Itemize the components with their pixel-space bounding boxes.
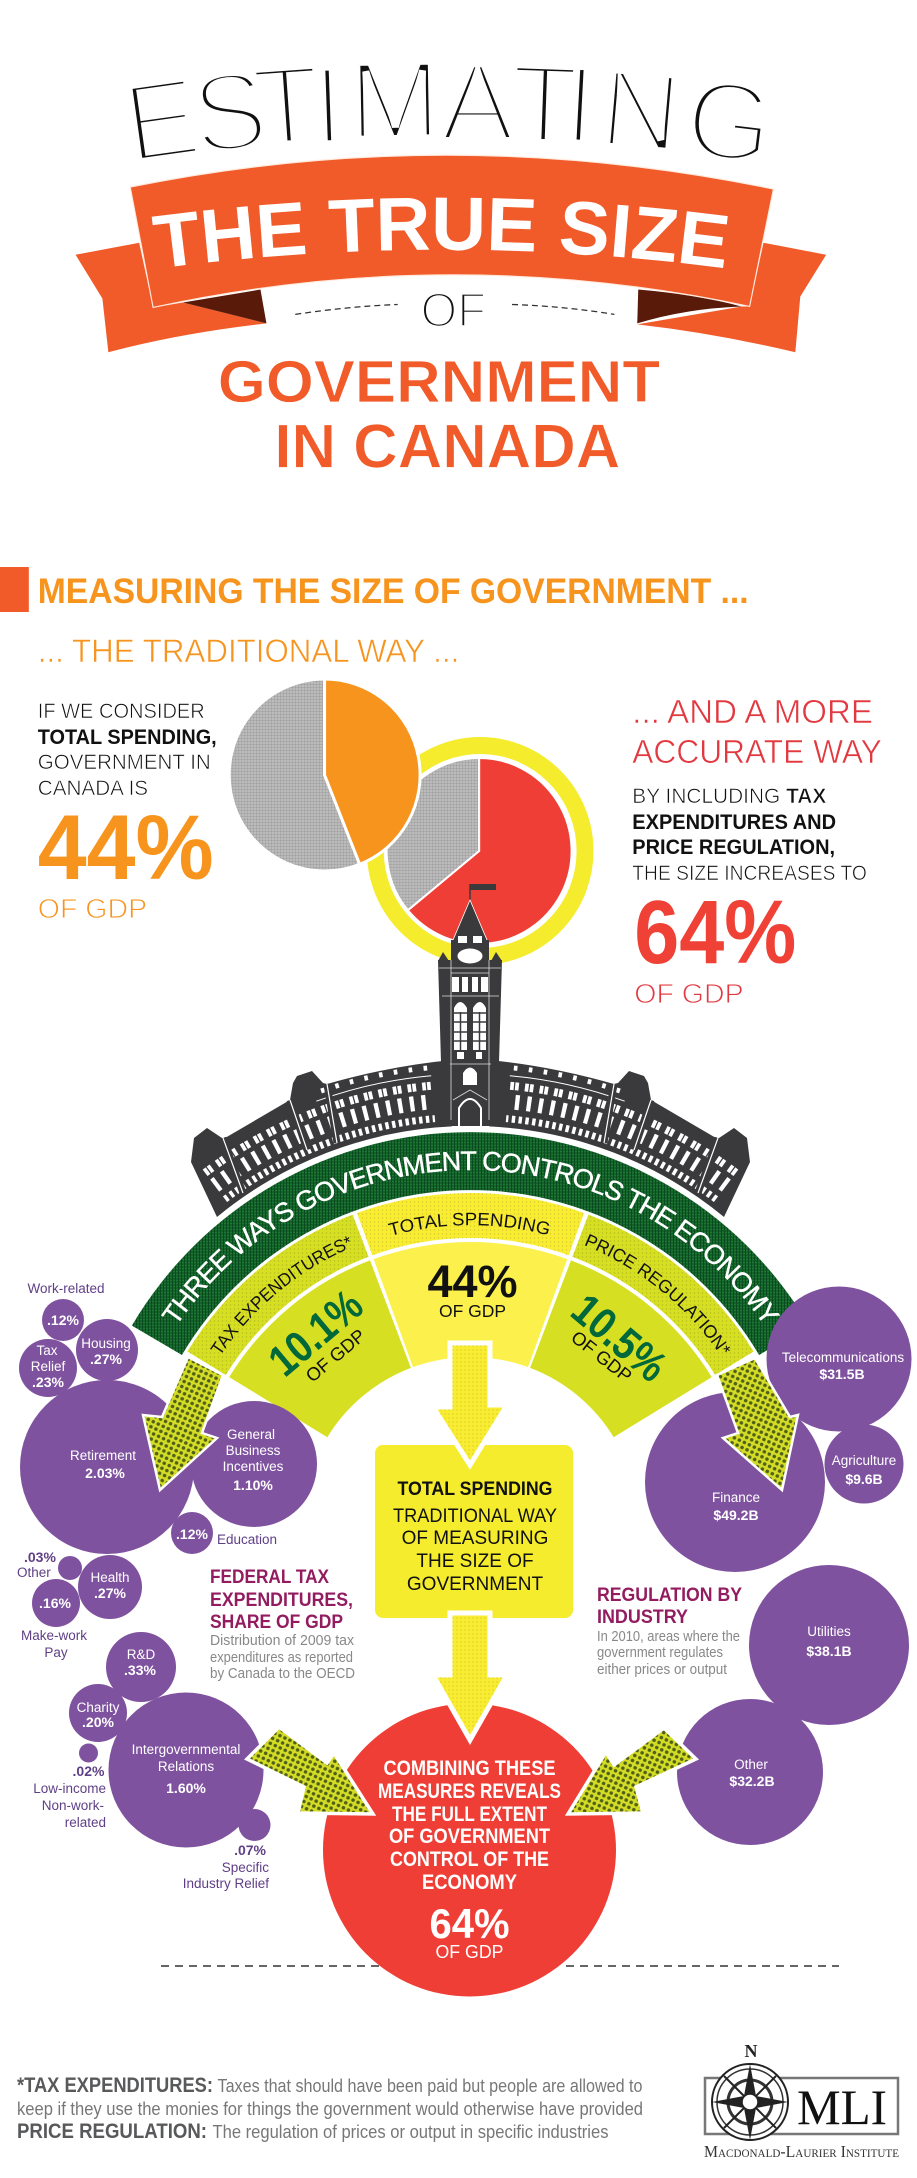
sector: price regulation: 10.5% xyxy=(562,1285,676,1392)
bubble labels outside: Industry Relief xyxy=(183,1876,269,1891)
bubble: work-related: .12% xyxy=(47,1312,80,1328)
sector: tax expenditures xyxy=(188,1214,411,1438)
ribbon right tail xyxy=(637,243,826,352)
arch diagram xyxy=(132,1132,794,1438)
bubble: make-work pay: .16% xyxy=(39,1595,72,1611)
bubble: utilities xyxy=(749,1565,909,1725)
caption: regulation by industry: government regulates xyxy=(597,1645,723,1661)
bubble labels outside xyxy=(21,1281,269,1891)
bubble labels outside: Specific xyxy=(222,1860,269,1875)
bubble: utilities: $38.1B xyxy=(806,1643,852,1659)
red circle: combined measures: THE FULL EXTENT xyxy=(392,1803,547,1826)
title: Estimating: ESTIMATING xyxy=(116,37,780,189)
bubble: education: .12% xyxy=(176,1526,209,1542)
bubble: education: Education xyxy=(217,1532,277,1547)
bubble: intergovernmental relations: Intergovernmental xyxy=(132,1742,240,1757)
bubble: r and d xyxy=(106,1632,176,1702)
text block: more accurate way xyxy=(632,693,882,885)
heading: government in canada xyxy=(218,348,660,482)
caption: federal tax expenditures xyxy=(210,1567,355,1682)
arrow: price regulation to bubbles xyxy=(717,1358,798,1490)
bubble: intergovernmental relations: Relations xyxy=(158,1759,214,1774)
text block: total spending: CANADA IS xyxy=(38,777,148,800)
caption: federal tax expenditures: EXPENDITURES, xyxy=(210,1590,353,1611)
stat label: of gdp: OF GDP xyxy=(634,978,744,1009)
caption: federal tax expenditures: FEDERAL TAX xyxy=(210,1567,329,1588)
text block: more accurate way: ... AND A MORE xyxy=(632,693,873,730)
bubble: telecommunications: Telecommunications xyxy=(782,1350,904,1365)
ribbon main panel xyxy=(130,155,773,307)
bubble: health: .27% xyxy=(94,1585,127,1601)
connector word: of xyxy=(295,284,614,337)
section marker block xyxy=(0,567,29,612)
caption: regulation by industry xyxy=(597,1585,742,1678)
sector: total spending: TOTAL SPENDING xyxy=(388,1212,550,1235)
bubble: agriculture: $9.6B xyxy=(845,1471,883,1487)
red circle: combined measures: CONTROL OF THE xyxy=(390,1848,549,1871)
bubble: health: Health xyxy=(90,1570,130,1585)
sector: total spending: OF GDP xyxy=(439,1301,506,1321)
ribbon left tail xyxy=(76,243,266,352)
caption: regulation by industry: INDUSTRY xyxy=(597,1607,688,1628)
bubble: tax relief xyxy=(19,1339,77,1397)
bubble: other: .03% xyxy=(24,1549,56,1565)
bubble: finance: $49.2B xyxy=(713,1507,759,1523)
green arch band xyxy=(132,1132,794,1355)
bubble: r and d: R&D xyxy=(127,1647,155,1662)
bubble: general business incentives: Incentives xyxy=(223,1459,284,1474)
yellow box: total spending xyxy=(375,1445,573,1618)
bubble: low-income xyxy=(79,1744,98,1762)
bubble: other xyxy=(17,1549,82,1580)
bubble: intergovernmental relations xyxy=(108,1692,264,1848)
bubble: telecommunications xyxy=(766,1286,912,1432)
logo: Macdonald-Laurier Institute xyxy=(704,2041,899,2161)
bubble: general business incentives: 1.10% xyxy=(233,1477,273,1493)
bubble: other: Other xyxy=(734,1757,768,1772)
sector: tax expenditures: TAX EXPENDITURES* xyxy=(210,1236,350,1353)
yellow box: total spending: TRADITIONAL WAY xyxy=(393,1506,557,1527)
caption: regulation by industry: either prices or output xyxy=(597,1662,727,1678)
bubble labels outside: Work-related xyxy=(27,1281,105,1296)
stat label: of gdp: OF GDP xyxy=(38,893,147,924)
bubble labels outside: Make-work xyxy=(21,1628,87,1643)
connector word: of: OF xyxy=(421,284,486,337)
text block: more accurate way: EXPENDITURES AND xyxy=(632,811,836,834)
header: title and ribbon xyxy=(76,37,826,482)
ribbon left fold xyxy=(183,290,266,323)
bubble labels outside: .07% xyxy=(234,1842,267,1858)
stat: 44 percent: 44% xyxy=(38,797,214,899)
logo: Macdonald-Laurier Institute: MLI xyxy=(797,2079,887,2135)
bubble: tax relief: Relief xyxy=(31,1359,66,1374)
bubble: housing: Housing xyxy=(81,1336,131,1351)
bubble: other xyxy=(677,1699,823,1845)
footnote definitions: *TAX EXPENDITURES: xyxy=(17,2074,213,2097)
sector: total spending: 44% xyxy=(427,1256,518,1307)
logo: Macdonald-Laurier Institute: N xyxy=(744,2041,758,2061)
text block: more accurate way: PRICE REGULATION, xyxy=(632,836,835,859)
tax expenditure bubbles xyxy=(17,1299,317,1848)
sector: price regulation: OF GDP xyxy=(567,1326,636,1387)
caption: federal tax expenditures: by Canada to the OECD xyxy=(210,1666,355,1682)
pie chart: 44 percent xyxy=(229,679,420,871)
bubble: finance: Finance xyxy=(712,1490,760,1505)
bubble: agriculture: Agriculture xyxy=(832,1453,896,1468)
bubble: health xyxy=(78,1555,142,1619)
footnote definitions: The regulation of prices or output in specific industries xyxy=(212,2122,608,2142)
bubble: finance xyxy=(645,1392,825,1572)
bubble: other: $32.2B xyxy=(729,1773,775,1789)
red circle: combined measures: OF GOVERNMENT xyxy=(389,1825,550,1848)
caption: federal tax expenditures: expenditures as reported xyxy=(210,1650,353,1666)
sector: price regulation: PRICE REGULATION* xyxy=(585,1234,730,1352)
text block: total spending: TOTAL SPENDING, xyxy=(38,726,217,749)
bubble: work-related xyxy=(42,1299,84,1341)
yellow box: total spending: OF MEASURING xyxy=(402,1528,548,1549)
bubble: specific industry relief xyxy=(238,1809,270,1841)
sector: price regulation xyxy=(530,1214,754,1438)
bubble: retirement: Retirement xyxy=(70,1448,136,1463)
logo: Macdonald-Laurier Institute: Macdonald-Laurier Institute xyxy=(704,2142,899,2161)
yellow box: total spending: GOVERNMENT xyxy=(407,1574,543,1595)
bubble: housing xyxy=(76,1319,138,1381)
heading on arch: THREE WAYS GOVERNMENT CONTROLS THE ECONOMY xyxy=(161,1151,780,1322)
bubble: charity: .20% xyxy=(82,1714,115,1730)
sector: tax expenditures: OF GDP xyxy=(301,1325,369,1386)
bubble: intergovernmental relations: 1.60% xyxy=(166,1780,206,1796)
text block: more accurate way: THE SIZE INCREASES TO xyxy=(632,862,867,885)
red circle: combined measures: ECONOMY xyxy=(422,1871,517,1894)
red circle: combined measures: OF GDP xyxy=(436,1942,504,1962)
bubble: tax relief: .23% xyxy=(32,1374,65,1390)
bubble: make-work pay xyxy=(32,1579,80,1627)
sector: total spending xyxy=(357,1193,584,1368)
caption: regulation by industry: REGULATION BY xyxy=(597,1585,742,1606)
heading: government in canada: IN CANADA xyxy=(274,413,620,482)
footnote definitions: keep if they use the monies for things the government would otherwise have provided xyxy=(17,2099,643,2119)
text block: total spending: IF WE CONSIDER xyxy=(38,700,205,723)
heading: government in canada: GOVERNMENT xyxy=(218,348,660,415)
caption: federal tax expenditures: Distribution of 2009 tax xyxy=(210,1633,355,1649)
bubble: other: Other xyxy=(17,1565,51,1580)
bubble labels outside: .02% xyxy=(73,1763,105,1779)
section: measuring the size of government xyxy=(0,567,882,1009)
bubble: retirement xyxy=(20,1380,194,1554)
footnote definitions: Taxes that should have been paid but people are allowed to xyxy=(218,2076,642,2096)
text block: total spending xyxy=(38,700,217,800)
arrow: tax expenditures to bubbles xyxy=(143,1357,223,1490)
text block: more accurate way: BY INCLUDING TAX xyxy=(632,785,826,808)
bubble: r and d: .33% xyxy=(124,1662,157,1678)
sector: tax expenditures: 10.1% xyxy=(260,1280,372,1386)
bubble: tax relief: Tax xyxy=(36,1343,58,1358)
red circle: combined measures xyxy=(323,1613,616,1996)
regulation bubbles xyxy=(645,1286,912,1845)
bubble: telecommunications: $31.5B xyxy=(819,1366,865,1382)
bubble: agriculture xyxy=(824,1424,904,1504)
bubble: charity xyxy=(69,1684,127,1742)
arrow: box to red circle xyxy=(433,1613,507,1740)
clock tower xyxy=(438,884,502,1126)
bubble: general business incentives xyxy=(191,1401,317,1527)
footnote definitions: PRICE REGULATION: xyxy=(17,2120,207,2143)
icon: compass rose xyxy=(712,2064,788,2140)
bubble: housing: .27% xyxy=(90,1351,123,1367)
bubble: general business incentives: General xyxy=(227,1427,275,1442)
arrow: regulation bubbles to red circle xyxy=(568,1728,696,1814)
bubble labels outside: related xyxy=(65,1815,106,1830)
yellow box: total spending: THE SIZE OF xyxy=(416,1551,534,1572)
text block: more accurate way: ACCURATE WAY xyxy=(632,733,882,770)
subheading: traditional way: ... THE TRADITIONAL WAY ... xyxy=(38,633,459,669)
footnote definitions xyxy=(17,2074,643,2143)
section heading: MEASURING THE SIZE OF GOVERNMENT ... xyxy=(38,572,749,611)
illustration: parliament building xyxy=(191,884,750,1217)
bubble labels outside: Low-income xyxy=(33,1781,106,1796)
bubble: education xyxy=(171,1512,277,1554)
bubble: general business incentives: Business xyxy=(226,1443,281,1458)
bubble labels outside: Pay xyxy=(44,1645,68,1660)
red circle: combined measures: 64% xyxy=(430,1900,510,1947)
caption: federal tax expenditures: SHARE OF GDP xyxy=(210,1612,343,1633)
bubble labels outside: Non-work- xyxy=(42,1798,104,1813)
ribbon right fold xyxy=(637,290,742,323)
arrow: tax bubbles to red circle xyxy=(247,1727,373,1814)
bubble: utilities: Utilities xyxy=(807,1624,851,1639)
red circle: combined measures: MEASURES REVEALS xyxy=(378,1780,561,1803)
heading: the true size: THE TRUE SIZE xyxy=(152,198,728,268)
text block: total spending: GOVERNMENT IN xyxy=(38,751,211,774)
caption: regulation by industry: In 2010, areas where the xyxy=(597,1629,740,1645)
bubble: charity: Charity xyxy=(77,1700,120,1715)
red circle: combined measures: COMBINING THESE xyxy=(384,1757,556,1780)
yellow box: total spending: TOTAL SPENDING xyxy=(398,1479,552,1500)
bubble: retirement: 2.03% xyxy=(85,1465,125,1481)
stat: 64 percent: 64% xyxy=(634,883,796,983)
arrow: sector to box xyxy=(433,1343,507,1465)
pie chart: 64 percent with ring xyxy=(375,746,585,956)
